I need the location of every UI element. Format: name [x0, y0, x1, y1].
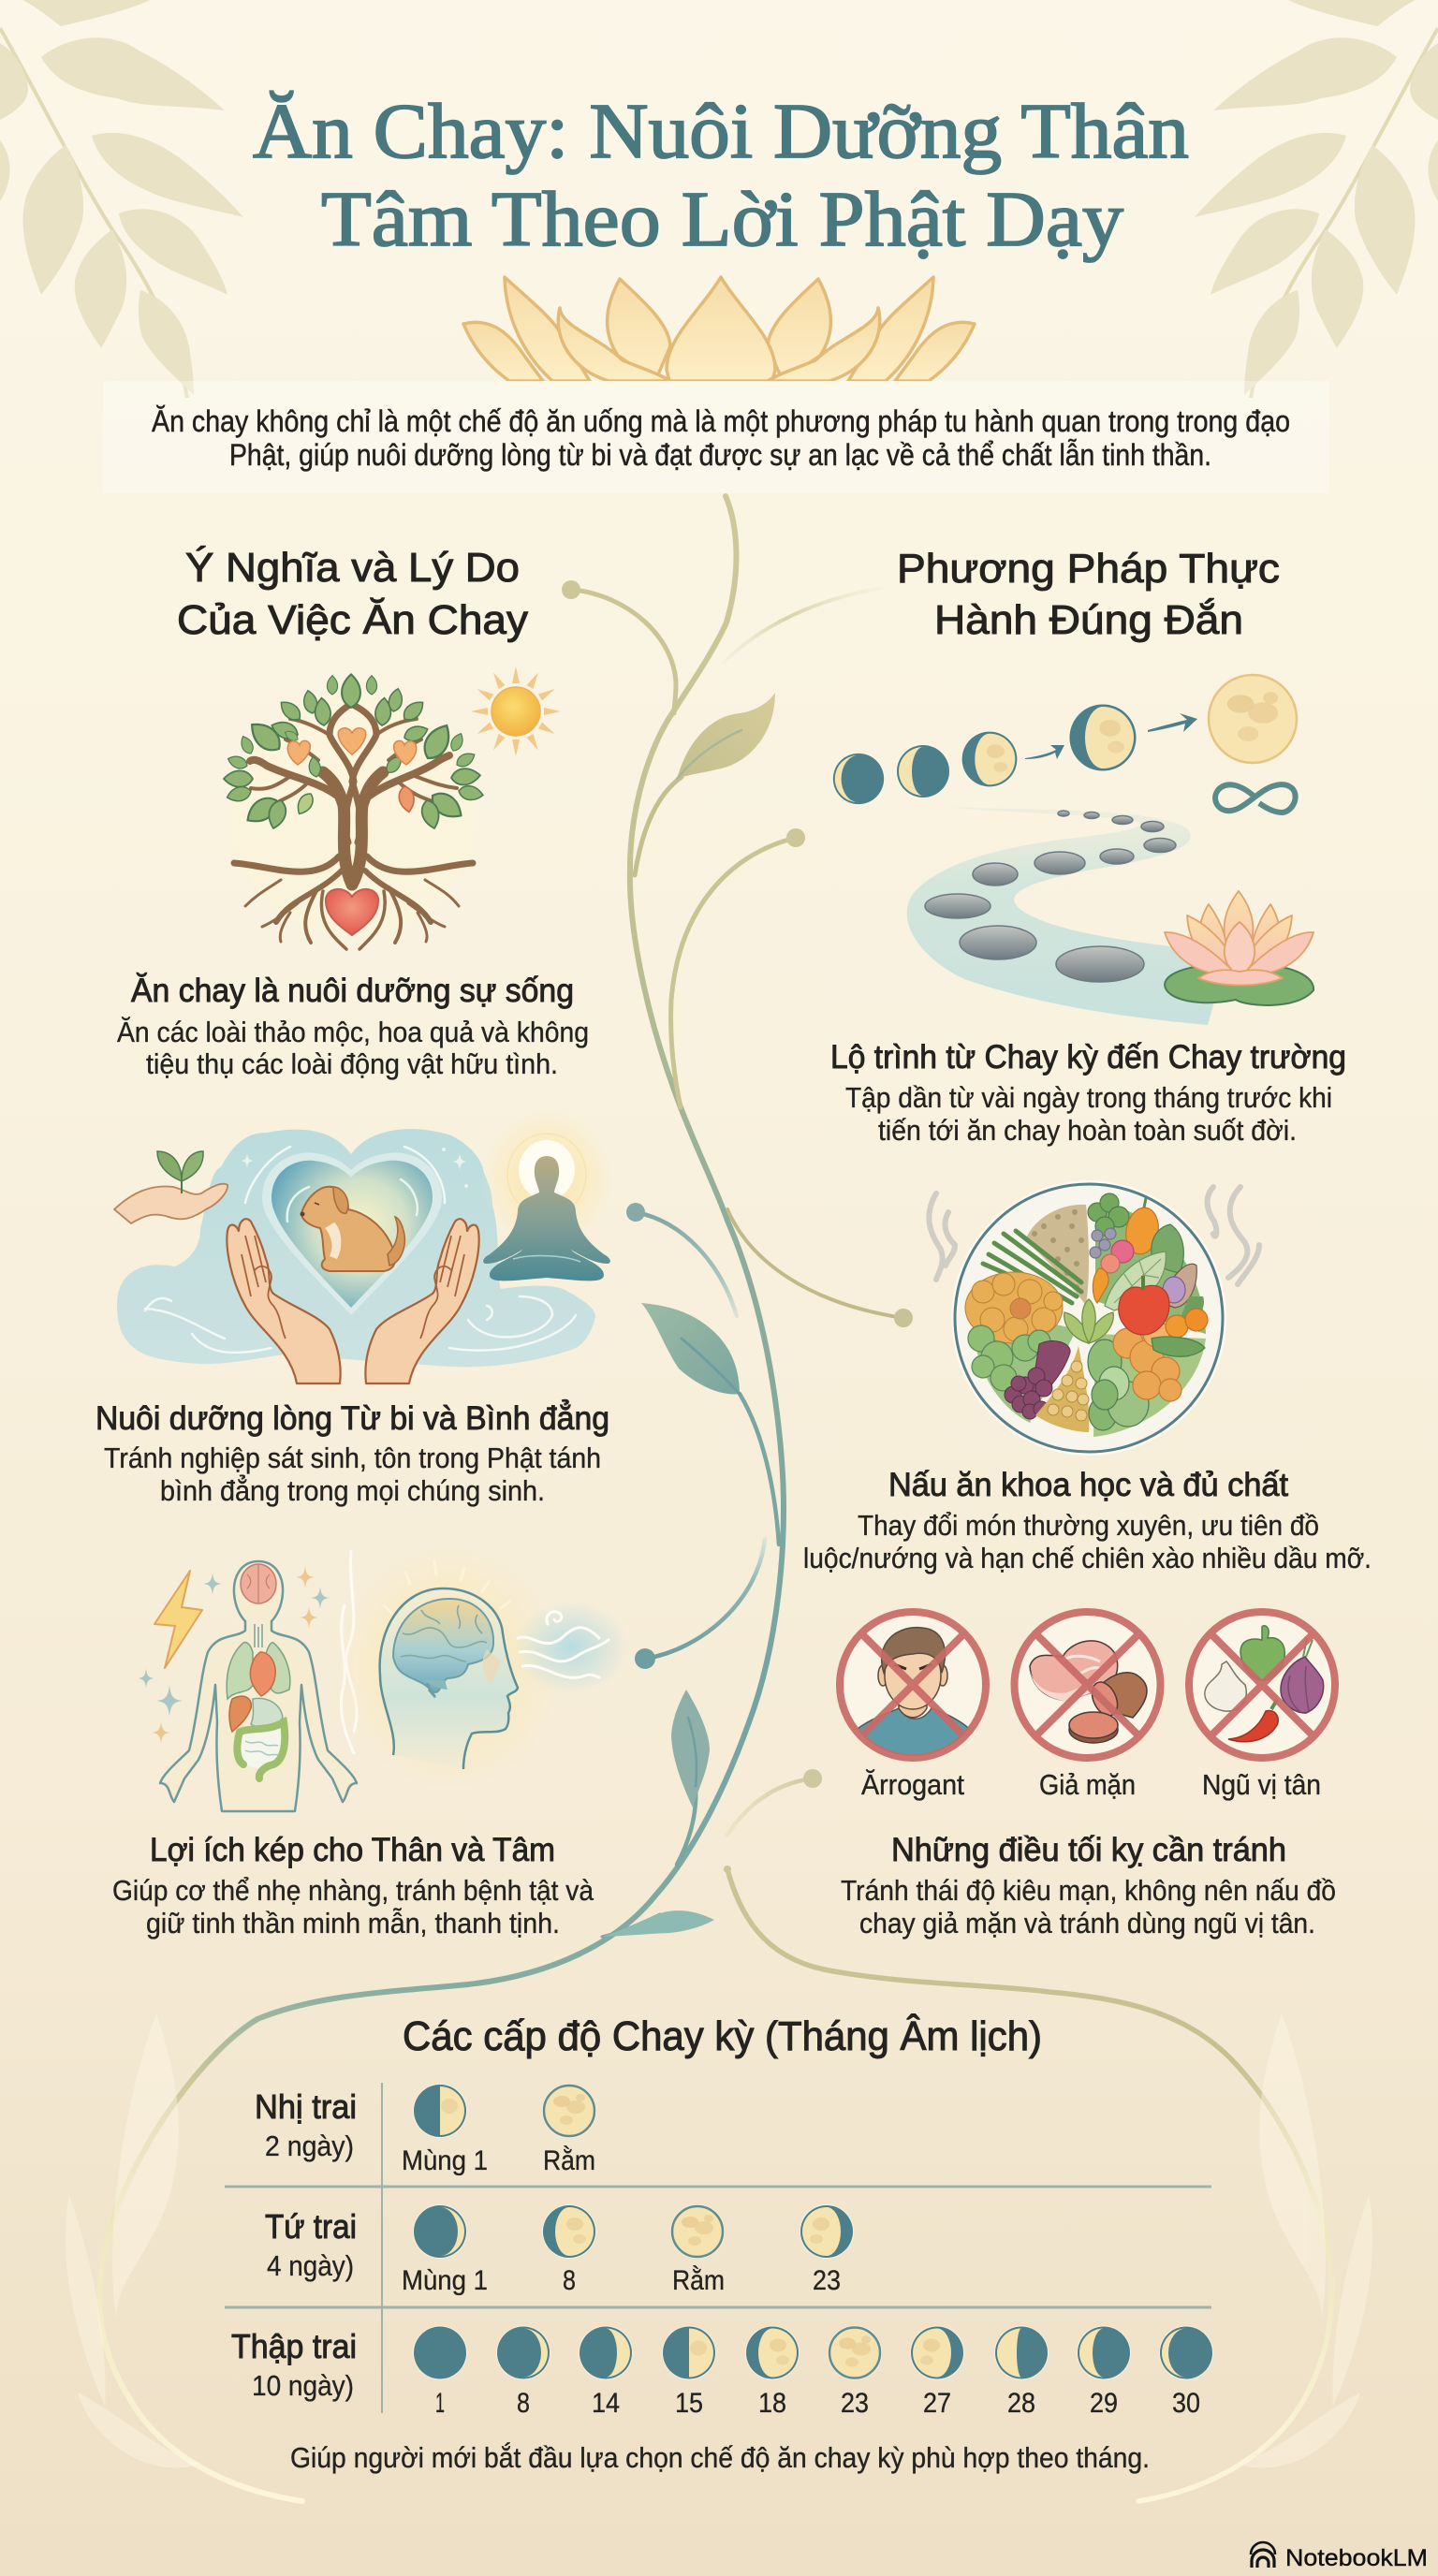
beans [1035, 1346, 1089, 1432]
icon: head profile with brain [337, 1544, 629, 1788]
item text: balanced cooking: luộc/nướng và hạn chế chiên xào nhiều dầu mỡ. [803, 1542, 1372, 1574]
food base patches [973, 1203, 1206, 1437]
item text: gradual path: Lộ trình từ Chay kỳ đến Chay trường [830, 1039, 1346, 1076]
item text: balanced cooking: Thay đổi món thường xuyên, ưu tiên đồ [858, 1509, 1319, 1542]
icon: tree with heart roots [224, 674, 484, 949]
row: Nhị trai: Nhị trai [255, 2087, 357, 2126]
icon: plate of vegetables [951, 1180, 1226, 1456]
icon labels: Giả mặn [1039, 1768, 1136, 1801]
NotebookLM logo and wordmark [1251, 2542, 1428, 2571]
title: Tâm Theo Lời Phật Dạy [321, 176, 1123, 263]
item text: gradual path: tiến tới ăn chay hoàn toàn suốt đời. [878, 1114, 1297, 1147]
row: Thập trai: 30 [1172, 2388, 1200, 2419]
panel: balanced cooking [803, 1180, 1372, 1574]
calendar footnote: Giúp người mới bắt đầu lựa chọn chế độ ăn chay kỳ phù hợp theo tháng. [290, 2441, 1150, 2474]
row: Tứ trai: 23 [813, 2265, 841, 2296]
icon: infinity symbol [1215, 784, 1296, 812]
heading: left column [177, 545, 528, 643]
icon: lotus under title [463, 277, 975, 381]
row: Nhị trai: Mùng 1 [402, 2145, 488, 2176]
center herb [1064, 1299, 1113, 1343]
icon: heart with puppy [262, 1152, 442, 1315]
row: Thập trai: 29 [1090, 2388, 1118, 2419]
illustration: water swirl background [117, 1129, 595, 1367]
icon labels [861, 1768, 1321, 1801]
vine leaves [602, 693, 775, 1937]
row: Tứ trai: 4 ngày) [267, 2249, 354, 2282]
tofu [965, 1272, 1063, 1343]
item text: nourishing life: tiệu thụ các loài động vật hữu tình. [146, 1047, 558, 1080]
row: Thập trai: 1 [435, 2388, 445, 2419]
calendar heading: Các cấp độ Chay kỳ (Tháng Âm lịch) [403, 2013, 1042, 2059]
row: Nhị trai [255, 2084, 596, 2176]
item text: compassion: Nuôi dưỡng lòng Từ bi và Bình đẳng [95, 1399, 609, 1437]
icon: sun [471, 666, 561, 756]
intro text: Phật, giúp nuôi dưỡng lòng từ bi và đạt được sự an lạc về cả thể chất lẫn tinh thần. [229, 438, 1211, 472]
grains [1025, 1205, 1089, 1306]
item text: balanced cooking: Nấu ăn khoa học và đủ chất [888, 1467, 1288, 1503]
NotebookLM logo and wordmark: NotebookLM [1285, 2545, 1428, 2571]
heading: left column: Của Việc Ăn Chay [177, 597, 528, 643]
item text: compassion: bình đẳng trong mọi chúng sinh. [160, 1473, 545, 1507]
icon: calm breath waves [518, 1612, 609, 1677]
icon: cupped hands [227, 1219, 479, 1383]
icon: no pungent vegetables [1191, 1614, 1333, 1756]
orange slices [1113, 1321, 1181, 1401]
intro text [152, 404, 1290, 472]
icon: lightning bolt [154, 1571, 202, 1668]
row: Tứ trai [265, 2204, 854, 2296]
grapes [1005, 1341, 1070, 1419]
panel: things to avoid [840, 1612, 1336, 1939]
row: Thập trai: 18 [758, 2388, 786, 2419]
icon: hand holding sprout [114, 1151, 227, 1223]
row: Tứ trai: 8 [563, 2265, 576, 2296]
heading: right column [897, 546, 1280, 643]
icon: human body with organs [160, 1561, 357, 1811]
heading: left column: Ý Nghĩa và Lý Do [185, 545, 520, 591]
row: Thập trai: 28 [1007, 2388, 1035, 2419]
panel: gradual path [830, 675, 1346, 1147]
upper right produce [1088, 1193, 1208, 1356]
icon: sparkles [138, 1566, 330, 1744]
row: Thập trai [231, 2325, 1213, 2419]
icon: no mock meat [1016, 1614, 1158, 1756]
item text: nourishing life: Ăn chay là nuôi dưỡng sự sống [131, 973, 574, 1009]
item text: gradual path [830, 1039, 1346, 1147]
panel: compassion [95, 1109, 612, 1507]
item text: things to avoid: chay giả mặn và tránh dùng ngũ vị tân. [859, 1907, 1315, 1939]
item text: body and mind benefits: giữ tinh thần minh mẫn, thanh tịnh. [146, 1907, 560, 1939]
icon: meditating figure with halo [481, 1109, 612, 1281]
decorative white wavy lines [341, 1551, 357, 1753]
item text: things to avoid [841, 1832, 1336, 1939]
row: Tứ trai: Mùng 1 [402, 2265, 488, 2296]
decorative leaves: top right corner [1195, 0, 1438, 398]
panel: lunar calendar levels [225, 2013, 1213, 2474]
icon labels: Ngũ vị tân [1202, 1768, 1321, 1801]
row: Thập trai: 27 [923, 2388, 951, 2419]
decorative leaves: top left corner [0, 0, 243, 398]
item text: compassion: Tránh nghiệp sát sinh, tôn trong Phật tánh [104, 1442, 601, 1474]
row: Thập trai: Thập trai [231, 2327, 357, 2365]
item text: nourishing life: Ăn các loài thảo mộc, hoa quả và không [117, 1016, 589, 1048]
title: Ăn Chay: Nuôi Dưỡng Thân [253, 88, 1189, 175]
icon labels: Ărrogant [861, 1768, 964, 1801]
row: Tứ trai: Rằm [672, 2265, 725, 2296]
title [253, 88, 1189, 263]
heading: right column: Hành Đúng Đắn [934, 597, 1243, 643]
green beans [983, 1231, 1081, 1303]
item text: gradual path: Tập dần từ vài ngày trong tháng trước khi [845, 1081, 1332, 1114]
icon: pink lotus on lily pad [1165, 891, 1313, 1005]
panel: intro backdrop [103, 381, 1329, 493]
decorative white petals: bottom right [1237, 2013, 1372, 2467]
icon: no arrogance [844, 1616, 982, 1756]
central vine with branches and leaves [99, 496, 1331, 2501]
item text: compassion [95, 1399, 609, 1507]
item text: things to avoid: Tránh thái độ kiêu mạn, không nên nấu đồ [841, 1874, 1336, 1907]
item text: body and mind benefits: Giúp cơ thể nhẹ nhàng, tránh bệnh tật và [112, 1874, 594, 1907]
panel: nourishing life [117, 666, 589, 1080]
item text: balanced cooking [803, 1467, 1372, 1574]
item text: body and mind benefits: Lợi ích kép cho Thân và Tâm [150, 1832, 555, 1868]
row: Thập trai: 15 [675, 2388, 703, 2419]
icon: steam wisps [929, 1187, 1259, 1284]
item text: nourishing life [117, 973, 589, 1080]
row: Nhị trai: 2 ngày) [265, 2130, 354, 2162]
decorative white petals: bottom left [66, 2013, 201, 2467]
item text: things to avoid: Những điều tối kỵ cần tránh [891, 1832, 1286, 1868]
greens left [968, 1325, 1050, 1391]
icon: prohibition rings [840, 1612, 1335, 1758]
heading: right column: Phương Pháp Thực [897, 546, 1280, 592]
icon: moon phases progression [832, 675, 1297, 805]
green veg bottom [1088, 1339, 1149, 1430]
illustration: winding stream with stepping stones [907, 807, 1217, 1025]
table grid lines [225, 2083, 1211, 2413]
row: Thập trai: 8 [517, 2388, 530, 2419]
row: Thập trai: 23 [841, 2388, 869, 2419]
row: Thập trai: 10 ngày) [252, 2369, 354, 2402]
row: Tứ trai: Tứ trai [265, 2207, 357, 2246]
row: Thập trai: 14 [592, 2388, 620, 2419]
row: Nhị trai: Rằm [543, 2145, 595, 2176]
item text: body and mind benefits [112, 1832, 594, 1939]
intro text: Ăn chay không chỉ là một chế độ ăn uống mà là một phương pháp tu hành quan trong trong đạo [152, 404, 1290, 438]
panel: body and mind benefits [112, 1544, 629, 1939]
vine connector dots [562, 580, 913, 1873]
